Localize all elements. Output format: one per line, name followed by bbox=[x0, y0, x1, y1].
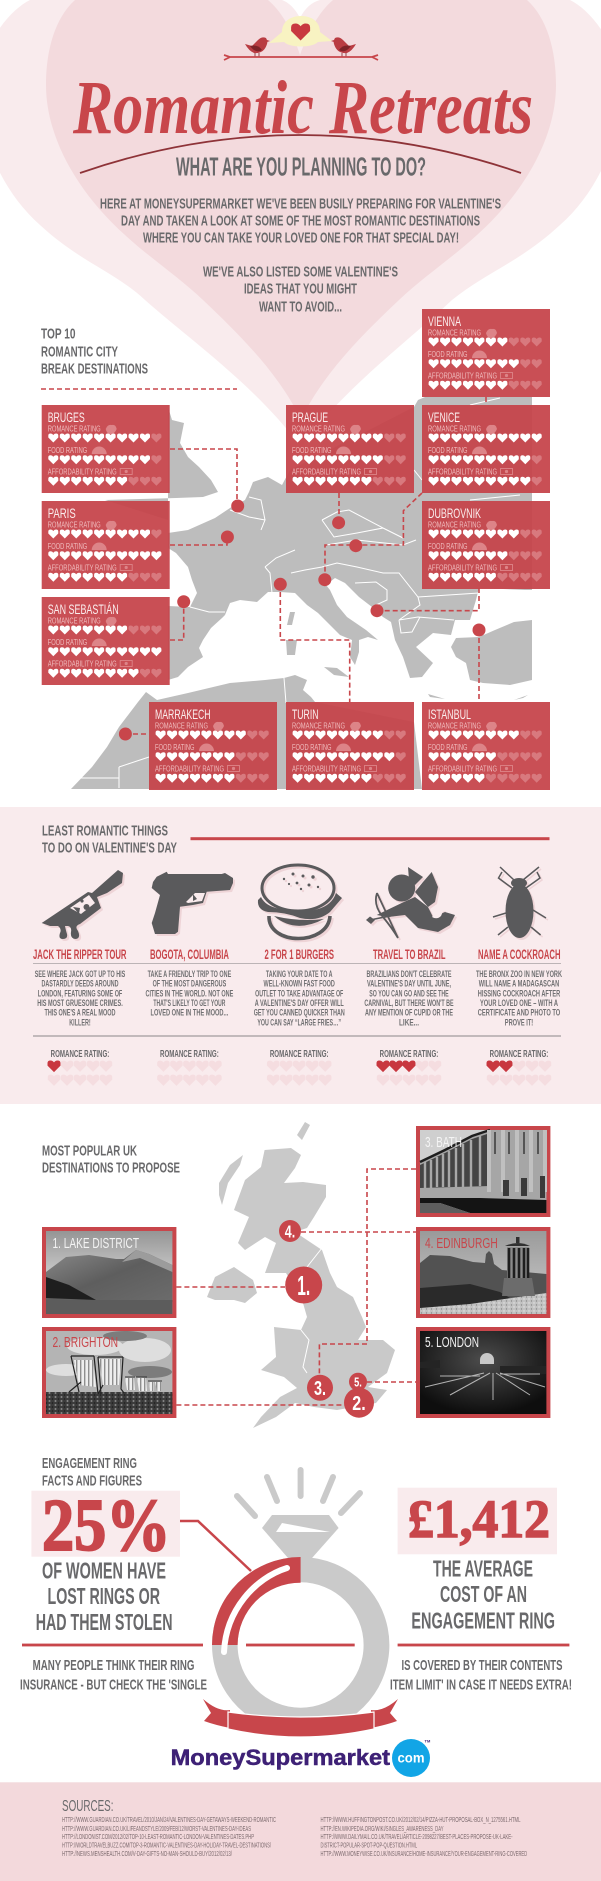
stat text: lost rings bbox=[36, 1558, 173, 1635]
sources list left: HTTP://WWW.GUARDIAN.CO.UK/TRAVEL/2010/JAN/24/VALENTINES-DAY-GETAWAYS-WEEKEND-ROMANTIC bbox=[62, 1817, 276, 1824]
text: Brazil: LIKE... bbox=[399, 1017, 419, 1027]
icon: burger bbox=[258, 865, 342, 938]
decorative arc under title bbox=[80, 135, 521, 173]
card: Venice: FOOD RATING bbox=[428, 445, 468, 455]
map pin: 1: 1. bbox=[297, 1270, 310, 1301]
card: San Sebastian: ROMANCE RATING bbox=[48, 615, 101, 625]
card: Istanbul bbox=[422, 702, 550, 790]
stat text: average cost bbox=[411, 1556, 555, 1634]
rating: Jack the Ripper bbox=[48, 1048, 112, 1086]
card: Turin bbox=[286, 702, 414, 790]
column titles: TRAVEL TO BRAZIL bbox=[373, 947, 446, 962]
photo: Edinburgh bbox=[416, 1227, 550, 1318]
card: Istanbul: ROMANCE RATING bbox=[428, 720, 481, 730]
photo label: 2. BRIGHTON bbox=[52, 1334, 118, 1351]
panel: sources bbox=[0, 1782, 601, 1881]
photo label: 3. BATH bbox=[425, 1134, 462, 1151]
icon: right bird bbox=[331, 37, 356, 57]
section heading: top 10: BREAK DESTINATIONS bbox=[41, 360, 148, 378]
card: Bruges: AFFORDABILITY RATING bbox=[48, 467, 117, 477]
photo label: 5. LONDON bbox=[425, 1334, 479, 1351]
card: Bruges bbox=[42, 405, 170, 493]
text: Bogota: OF THE MOST DANGEROUS bbox=[153, 979, 226, 989]
card: Turin: FOOD RATING bbox=[292, 742, 332, 752]
icon: branch bbox=[224, 55, 378, 60]
text: ring insurance left: MANY PEOPLE THINK THEIR RING bbox=[33, 1657, 194, 1674]
text: Jack the Ripper: HIS MOST GRUESOME CRIMES. bbox=[37, 998, 123, 1008]
intro text block bbox=[100, 196, 501, 316]
rating: Brazil bbox=[376, 1048, 441, 1086]
photo: Bath bbox=[416, 1126, 550, 1217]
photo: London bbox=[416, 1327, 550, 1418]
stat text: lost rings: LOST RINGS OR bbox=[48, 1583, 160, 1609]
card: Bruges: BRUGES bbox=[48, 409, 85, 425]
card: Vienna: VIENNA bbox=[428, 313, 461, 329]
card: Venice: ROMANCE RATING bbox=[428, 423, 481, 433]
sources list left: HTTP://NEWS.MENSHEALTH.COM/V-DAY-GIFTS-NO-MAN-SHOULD-BUY/2012/02/13/ bbox=[62, 1851, 232, 1858]
column titles: 2 FOR 1 BURGERS bbox=[264, 947, 334, 962]
sources list right: HTTP://EN.WIKIPEDIA.ORG/WIKI/SINGLES_AWARENESS_DAY bbox=[320, 1826, 444, 1833]
card: Prague bbox=[286, 405, 414, 493]
card: San Sebastian: AFFORDABILITY RATING bbox=[48, 659, 117, 669]
text: Bogota: TAKE A FRIENDLY TRIP TO ONE bbox=[148, 969, 231, 979]
map pin: 1 bbox=[285, 1266, 322, 1304]
card: Vienna: FOOD RATING bbox=[428, 349, 468, 359]
card: Marrakech: MARRAKECH bbox=[155, 706, 211, 722]
stat text: lost rings: HAD THEM STOLEN bbox=[36, 1609, 173, 1635]
sources list left: HTTP://WWW.GUARDIAN.CO.UK/LIFEANDSTYLE/2009/FEB/12/WORST-VALENTINES-DAY-IDEAS bbox=[62, 1826, 251, 1833]
sources list left: HTTP://WORLDTRAVELBUZZ.COM/TOP-3-ROMANTIC-VALENTINES-DAY-HOLIDAY-TRAVEL-DESTINATIONS/ bbox=[62, 1842, 271, 1850]
photo: Lake District bbox=[42, 1227, 176, 1318]
text: Jack the Ripper bbox=[35, 969, 125, 1027]
text: Jack the Ripper: LONDON, FEATURING SOME OF bbox=[38, 988, 123, 998]
intro text block: IDEAS THAT YOU MIGHT bbox=[244, 280, 357, 298]
section heading: top 10: ROMANTIC CITY bbox=[41, 344, 118, 360]
map pin: 3: 3. bbox=[314, 1378, 326, 1400]
text: cockroach: YOUR LOVED ONE – WITH A bbox=[480, 998, 558, 1008]
section heading: LEAST ROMANTIC THINGS bbox=[42, 822, 168, 840]
text: burgers: A VALENTINE'S DAY OFFER WILL bbox=[255, 998, 344, 1008]
map pin: 4: 4. bbox=[285, 1222, 295, 1242]
text: Bogota: LOVED ONE IN THE MOOD... bbox=[150, 1008, 228, 1018]
card: Turin: AFFORDABILITY RATING bbox=[292, 764, 361, 774]
text: burgers: GET YOU CANNED QUICKER THAN bbox=[254, 1008, 345, 1018]
stat: average cost: £1,412 bbox=[408, 1489, 550, 1549]
card: Paris: AFFORDABILITY RATING bbox=[48, 563, 117, 573]
intro text block: WE'VE ALSO LISTED SOME VALENTINE'S bbox=[203, 264, 398, 280]
text: Bogota: CITIES IN THE WORLD. NOT ONE bbox=[145, 988, 233, 998]
section heading: UK destinations bbox=[42, 1142, 180, 1176]
section heading bbox=[42, 822, 177, 856]
icon: left bird bbox=[245, 37, 270, 57]
icon: bloody knife bbox=[42, 870, 123, 939]
logo: MoneySupermarket: com bbox=[398, 1750, 424, 1766]
icon: cockroach bbox=[493, 867, 546, 938]
text: burgers: YOU CAN SAY “LARGE FRIES…” bbox=[257, 1017, 341, 1027]
section heading: UK destinations: MOST POPULAR UK bbox=[42, 1142, 137, 1160]
card: Venice: VENICE bbox=[428, 409, 460, 425]
map: UK and Ireland bbox=[207, 1122, 395, 1428]
section heading: engagement ring: ENGAGEMENT RING bbox=[42, 1455, 137, 1472]
card: Turin: ROMANCE RATING bbox=[292, 720, 345, 730]
card: Vienna bbox=[422, 309, 550, 397]
map pin: 3 bbox=[307, 1375, 333, 1401]
section heading: engagement ring bbox=[42, 1455, 142, 1490]
photo: Brighton bbox=[42, 1327, 176, 1418]
card: Dubrovnik: FOOD RATING bbox=[428, 541, 468, 551]
section heading: top 10 bbox=[41, 326, 148, 378]
ring sparkle rays bbox=[237, 1470, 360, 1516]
card: Marrakech: FOOD RATING bbox=[155, 742, 194, 752]
card: Vienna: ROMANCE RATING bbox=[428, 327, 481, 337]
ring band bbox=[212, 1557, 389, 1733]
card: Paris: ROMANCE RATING bbox=[48, 519, 101, 529]
text: Jack the Ripper: KILLER! bbox=[69, 1017, 91, 1027]
map pins bbox=[119, 500, 486, 740]
text: burgers: OUTLET TO TAKE ADVANTAGE OF bbox=[255, 988, 344, 998]
card: Dubrovnik: DUBROVNIK bbox=[428, 505, 481, 521]
text: Jack the Ripper: SEE WHERE JACK GOT UP TO HIS bbox=[35, 969, 125, 979]
logo: MoneySupermarket: MoneySupermarket bbox=[171, 1745, 391, 1770]
illustration: diamond ring bbox=[180, 1470, 398, 1737]
rating: Bogota bbox=[157, 1048, 222, 1086]
card: Paris: FOOD RATING bbox=[48, 541, 87, 551]
photo label: 4. EDINBURGH bbox=[425, 1235, 498, 1252]
text: burgers: WELL-KNOWN FAST FOOD bbox=[264, 979, 335, 989]
card: Turin: TURIN bbox=[292, 706, 318, 722]
card: Dubrovnik bbox=[422, 501, 550, 589]
card: Dubrovnik: AFFORDABILITY RATING bbox=[428, 563, 497, 573]
photo label: 1. LAKE DISTRICT bbox=[52, 1235, 139, 1252]
logo: MoneySupermarket: TM bbox=[424, 1738, 431, 1744]
divider lines bbox=[22, 1644, 569, 1646]
connector lines: map pins to city cards bbox=[125, 397, 486, 734]
stat text: lost rings: OF WOMEN HAVE bbox=[42, 1558, 166, 1584]
connector lines: UK pins to photos bbox=[176, 1169, 416, 1405]
text: ring insurance right bbox=[390, 1657, 572, 1694]
panel: least romantic things bbox=[0, 807, 601, 1104]
rating: cockroach bbox=[486, 1048, 551, 1086]
monument bbox=[502, 1237, 535, 1296]
card: Marrakech bbox=[149, 702, 277, 790]
card: Paris: PARIS bbox=[48, 505, 76, 521]
text: burgers bbox=[254, 969, 345, 1027]
icon: pistol bbox=[152, 872, 233, 934]
card: Marrakech: AFFORDABILITY RATING bbox=[155, 764, 224, 774]
text: ring insurance left: INSURANCE - BUT CHECK THE 'SINGLE bbox=[20, 1676, 207, 1694]
logo: MoneySupermarket bbox=[171, 1738, 431, 1777]
icon: speech bubble with heart bbox=[269, 16, 332, 46]
stat: 25 percent: 25% bbox=[42, 1485, 171, 1567]
banner bbox=[203, 1699, 398, 1737]
card: Vienna: AFFORDABILITY RATING bbox=[428, 371, 497, 381]
section heading: engagement ring: FACTS AND FIGURES bbox=[42, 1472, 142, 1490]
text: Jack the Ripper: DASTARDLY DEEDS AROUND bbox=[42, 979, 119, 989]
sources list right bbox=[320, 1817, 527, 1858]
map pin: 2 bbox=[344, 1388, 374, 1418]
diamond bbox=[262, 1515, 339, 1558]
rating: cockroach: ROMANCE RATING: bbox=[490, 1048, 548, 1060]
text: Brazil: VALENTINE'S DAY UNTIL JUNE, bbox=[367, 979, 451, 989]
card: Prague: AFFORDABILITY RATING bbox=[292, 467, 361, 477]
column titles: JACK THE RIPPER TOUR bbox=[33, 947, 127, 962]
card: Venice bbox=[422, 405, 550, 493]
map pin: 5: 5. bbox=[354, 1375, 362, 1389]
rating: burgers bbox=[267, 1048, 331, 1086]
card: San Sebastian bbox=[42, 597, 170, 685]
text: Brazil: ANY MENTION OF CUPID OR THE bbox=[365, 1008, 453, 1018]
section heading: TO DO ON VALENTINE'S DAY bbox=[42, 840, 177, 856]
map pin: 4 bbox=[279, 1220, 301, 1242]
column titles: BOGOTA, COLUMBIA bbox=[150, 947, 229, 962]
text: Bogota: THAT'S LIKELY TO GET YOUR bbox=[153, 998, 226, 1008]
map pin: 5 bbox=[349, 1373, 367, 1391]
text: Jack the Ripper: THIS ONE'S A REAL MOOD bbox=[44, 1008, 116, 1018]
sources heading: SOURCES: bbox=[62, 1798, 114, 1815]
card: Bruges: FOOD RATING bbox=[48, 445, 87, 455]
header illustration: love birds on a branch bbox=[224, 16, 378, 60]
text: Brazil: SO YOU CAN GO AND SEE THE bbox=[369, 988, 449, 998]
text: Bogota bbox=[145, 969, 233, 1018]
section heading: top 10: TOP 10 bbox=[41, 326, 76, 342]
map pin: 2: 2. bbox=[352, 1393, 366, 1415]
text: ring insurance left bbox=[20, 1657, 207, 1694]
card: Prague: ROMANCE RATING bbox=[292, 423, 345, 433]
stat text: average cost: THE AVERAGE bbox=[433, 1556, 533, 1582]
section heading: UK destinations: DESTINATIONS TO PROPOSE bbox=[42, 1160, 180, 1176]
text: Brazil bbox=[364, 969, 454, 1027]
card: San Sebastian: FOOD RATING bbox=[48, 637, 87, 647]
text: Brazil: BRAZILIANS DON'T CELEBRATE bbox=[366, 969, 452, 979]
rating: Bogota: ROMANCE RATING: bbox=[160, 1048, 219, 1060]
deck chairs bbox=[69, 1356, 162, 1394]
card: Bruges: ROMANCE RATING bbox=[48, 423, 101, 433]
icon: cupid bbox=[366, 867, 455, 938]
text: Brazil: CARNIVAL, BUT THERE WON'T BE bbox=[364, 998, 454, 1008]
map: Europe bbox=[71, 397, 532, 789]
card: Dubrovnik: ROMANCE RATING bbox=[428, 519, 481, 529]
intro text block: WANT TO AVOID... bbox=[259, 298, 342, 316]
card: Marrakech: ROMANCE RATING bbox=[155, 720, 208, 730]
background heart: outer bbox=[0, 0, 601, 447]
connector to 25% bbox=[180, 1521, 251, 1571]
card: Istanbul: FOOD RATING bbox=[428, 742, 468, 752]
card: Venice: AFFORDABILITY RATING bbox=[428, 467, 497, 477]
card: Istanbul: AFFORDABILITY RATING bbox=[428, 764, 497, 774]
text: cockroach: PROVE IT! bbox=[505, 1017, 533, 1027]
text: burgers: TAKING YOUR DATE TO A bbox=[266, 969, 333, 979]
card: San Sebastian: SAN SEBASTIÁN bbox=[48, 601, 119, 617]
sources list right: DISTRICT-POPULAR-SPOT-POP-QUESTION.HTML bbox=[320, 1842, 417, 1850]
sources list left: HTTP://LONDONIST.COM/2012/02/TOP-10-LEAST-ROMANTIC-LONDON-VALENTINES-DATES.PHP bbox=[62, 1834, 254, 1841]
rating: Brazil: ROMANCE RATING: bbox=[380, 1048, 438, 1060]
card: Istanbul: ISTANBUL bbox=[428, 706, 471, 722]
sources list left bbox=[62, 1817, 276, 1858]
card: Paris bbox=[42, 501, 170, 589]
column titles bbox=[33, 947, 560, 962]
card: Prague: FOOD RATING bbox=[292, 445, 332, 455]
rating: burgers: ROMANCE RATING: bbox=[270, 1048, 329, 1060]
ring red quarter: 25% bbox=[212, 1557, 301, 1645]
background heart: inner bbox=[46, 0, 556, 420]
rating: Jack the Ripper: ROMANCE RATING: bbox=[51, 1048, 109, 1060]
card: Prague: PRAGUE bbox=[292, 409, 328, 425]
text: cockroach bbox=[476, 969, 562, 1027]
stat text: average cost: COST OF AN bbox=[440, 1581, 527, 1607]
